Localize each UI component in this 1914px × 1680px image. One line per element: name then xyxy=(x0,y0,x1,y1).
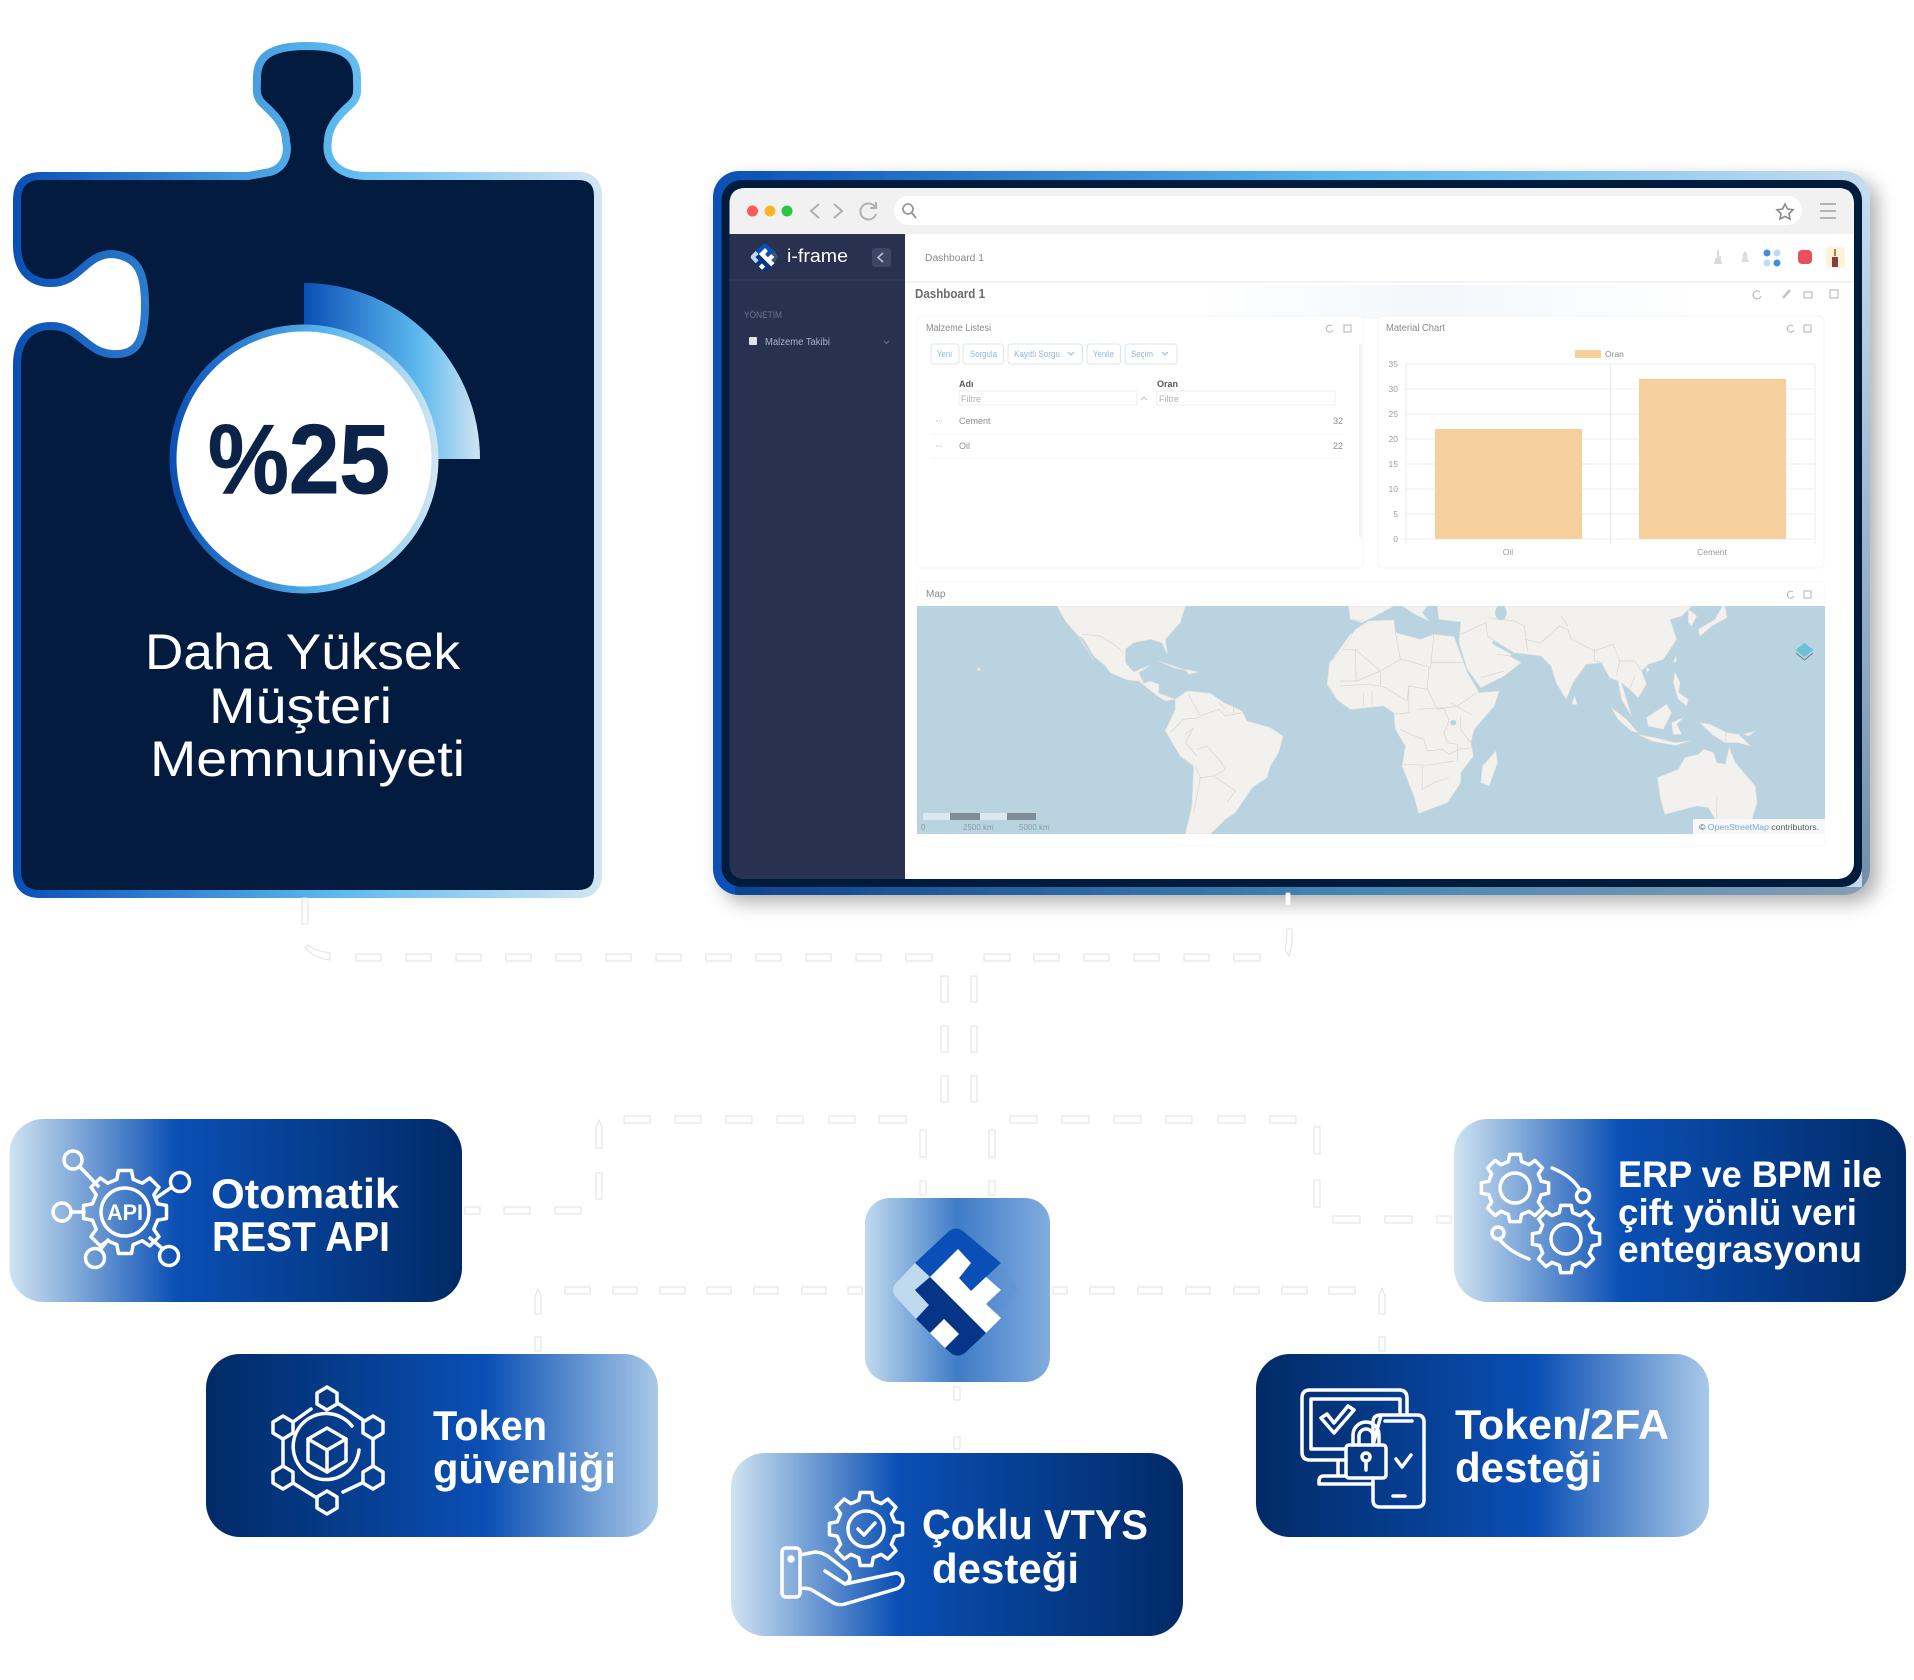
card text xyxy=(922,1501,1148,1592)
panel: puzzle piece satisfaction card xyxy=(17,46,598,894)
card text: desteği xyxy=(1455,1444,1602,1491)
y axis labels: 25 xyxy=(1389,409,1398,419)
white circle xyxy=(173,328,435,590)
table rows: Cement xyxy=(959,416,991,426)
y axis labels: 0 xyxy=(1393,534,1398,544)
card: Token güvenliği xyxy=(206,1354,658,1537)
map attribution xyxy=(1693,819,1825,834)
bars xyxy=(1435,429,1582,539)
map scale bar: 2500 km xyxy=(963,823,994,832)
y axis labels: 30 xyxy=(1389,384,1398,394)
map scale bar: 0 xyxy=(921,823,926,832)
card text: güvenliği xyxy=(433,1445,616,1492)
icon: API gear: API xyxy=(107,1200,143,1225)
card text: Token xyxy=(433,1402,547,1449)
panel: Material Chart: Oran xyxy=(1605,349,1624,359)
card text: Otomatik xyxy=(211,1170,400,1217)
card text: Çoklu VTYS xyxy=(922,1501,1148,1548)
card text xyxy=(211,1170,400,1260)
table rows: 32 xyxy=(1333,416,1343,426)
x axis labels: Oil xyxy=(1503,547,1513,557)
top navigation xyxy=(905,247,1854,282)
card text: çift yönlü veri xyxy=(1618,1192,1857,1233)
map land: Africa, Eurasia, Oceania xyxy=(1327,605,1757,819)
y axis labels: 20 xyxy=(1389,434,1398,444)
page heading bar xyxy=(915,285,1838,319)
y axis labels xyxy=(1389,359,1398,544)
icon: devices with lock xyxy=(1302,1390,1424,1507)
icon: token network xyxy=(273,1387,383,1514)
y axis labels: 15 xyxy=(1389,459,1398,469)
sidebar xyxy=(730,234,905,879)
card text xyxy=(1618,1154,1882,1270)
panel: Malzeme Listesi table: Kayıtlı Sorgu xyxy=(1014,349,1060,359)
sidebar item: Malzeme Takibi xyxy=(765,337,830,348)
panel: Malzeme Listesi table: Filtre xyxy=(1159,394,1179,404)
chart legend xyxy=(1575,350,1601,358)
card text: desteği xyxy=(932,1545,1079,1592)
x axis labels: Cement xyxy=(1697,547,1728,557)
map artwork xyxy=(917,605,1825,834)
panel: Malzeme Listesi table: Yenile xyxy=(1093,349,1114,359)
panel: browser dashboard mockup xyxy=(713,171,1870,895)
card text xyxy=(1455,1401,1669,1491)
table rows: 22 xyxy=(1333,441,1343,451)
panel: Malzeme Listesi table: Oran xyxy=(1157,379,1178,389)
y axis labels: 35 xyxy=(1389,359,1398,369)
card text: ERP ve BPM ile xyxy=(1618,1154,1882,1195)
card text: Token/2FA xyxy=(1455,1401,1669,1448)
connector: dashed lines xyxy=(302,893,1451,1449)
sidebar logo xyxy=(751,243,778,271)
stat caption xyxy=(145,624,465,787)
table rows xyxy=(959,416,1343,451)
stat caption: Daha Yüksek xyxy=(145,624,461,680)
toolbar buttons xyxy=(931,344,1177,364)
panel: Malzeme Listesi table: Malzeme Listesi xyxy=(926,323,991,334)
map land: Americas xyxy=(977,606,1371,834)
central logo tile xyxy=(865,1198,1050,1382)
panel: Malzeme Listesi table: Yeni xyxy=(937,349,952,359)
stat: %25: %25 xyxy=(208,404,390,514)
panel: Malzeme Listesi table: Filtre xyxy=(961,394,981,404)
browser frame xyxy=(713,171,1870,895)
brand name: i-frame xyxy=(787,246,848,266)
stat caption: Müşteri xyxy=(209,678,392,734)
stat caption: Memnuniyeti xyxy=(150,731,465,787)
card text: REST API xyxy=(212,1213,390,1260)
top navigation: Dashboard 1 xyxy=(925,253,984,264)
panel: Malzeme Listesi table xyxy=(917,316,1363,568)
card text: entegrasyonu xyxy=(1618,1229,1862,1270)
icon: API gear xyxy=(53,1151,190,1268)
icon: i-frame logo xyxy=(893,1228,1018,1356)
card: Otomatik REST API xyxy=(10,1119,462,1302)
map scale bar xyxy=(921,813,1050,832)
map scale bar: 5000 km xyxy=(1019,823,1050,832)
table rows: Oil xyxy=(959,441,970,451)
puzzle shape xyxy=(17,46,598,894)
chart grid xyxy=(1402,364,1815,544)
card: Çoklu VTYS xyxy=(731,1453,1183,1636)
panel: map xyxy=(917,582,1825,846)
sidebar section label: YÖNETİM xyxy=(744,310,782,320)
icon: two gears xyxy=(1481,1154,1600,1273)
panel: Material Chart xyxy=(1378,316,1824,568)
browser toolbar xyxy=(730,188,1854,234)
map ocean xyxy=(917,606,1825,834)
card text xyxy=(433,1402,616,1492)
table columns: Adı xyxy=(959,379,974,389)
panel: map: Map xyxy=(926,589,946,600)
panel: Malzeme Listesi table: Sorgula xyxy=(970,349,997,359)
y axis labels: 10 xyxy=(1389,484,1398,494)
panel: Material Chart: Material Chart xyxy=(1386,323,1445,334)
panel: Malzeme Listesi table: Seçim xyxy=(1131,349,1153,359)
card: ERP ve BPM xyxy=(1454,1119,1906,1302)
x axis labels xyxy=(1503,547,1728,557)
y axis labels: 5 xyxy=(1393,509,1398,519)
map layers control xyxy=(1796,643,1814,660)
icon: hand holding gear xyxy=(782,1492,903,1605)
quarter progress sector xyxy=(304,283,480,459)
page heading bar: Dashboard 1 xyxy=(915,287,985,301)
map attribution: © OpenStreetMap contributors. xyxy=(1699,823,1819,832)
browser screen xyxy=(730,188,1854,879)
card: Token/2FA xyxy=(1256,1354,1709,1537)
